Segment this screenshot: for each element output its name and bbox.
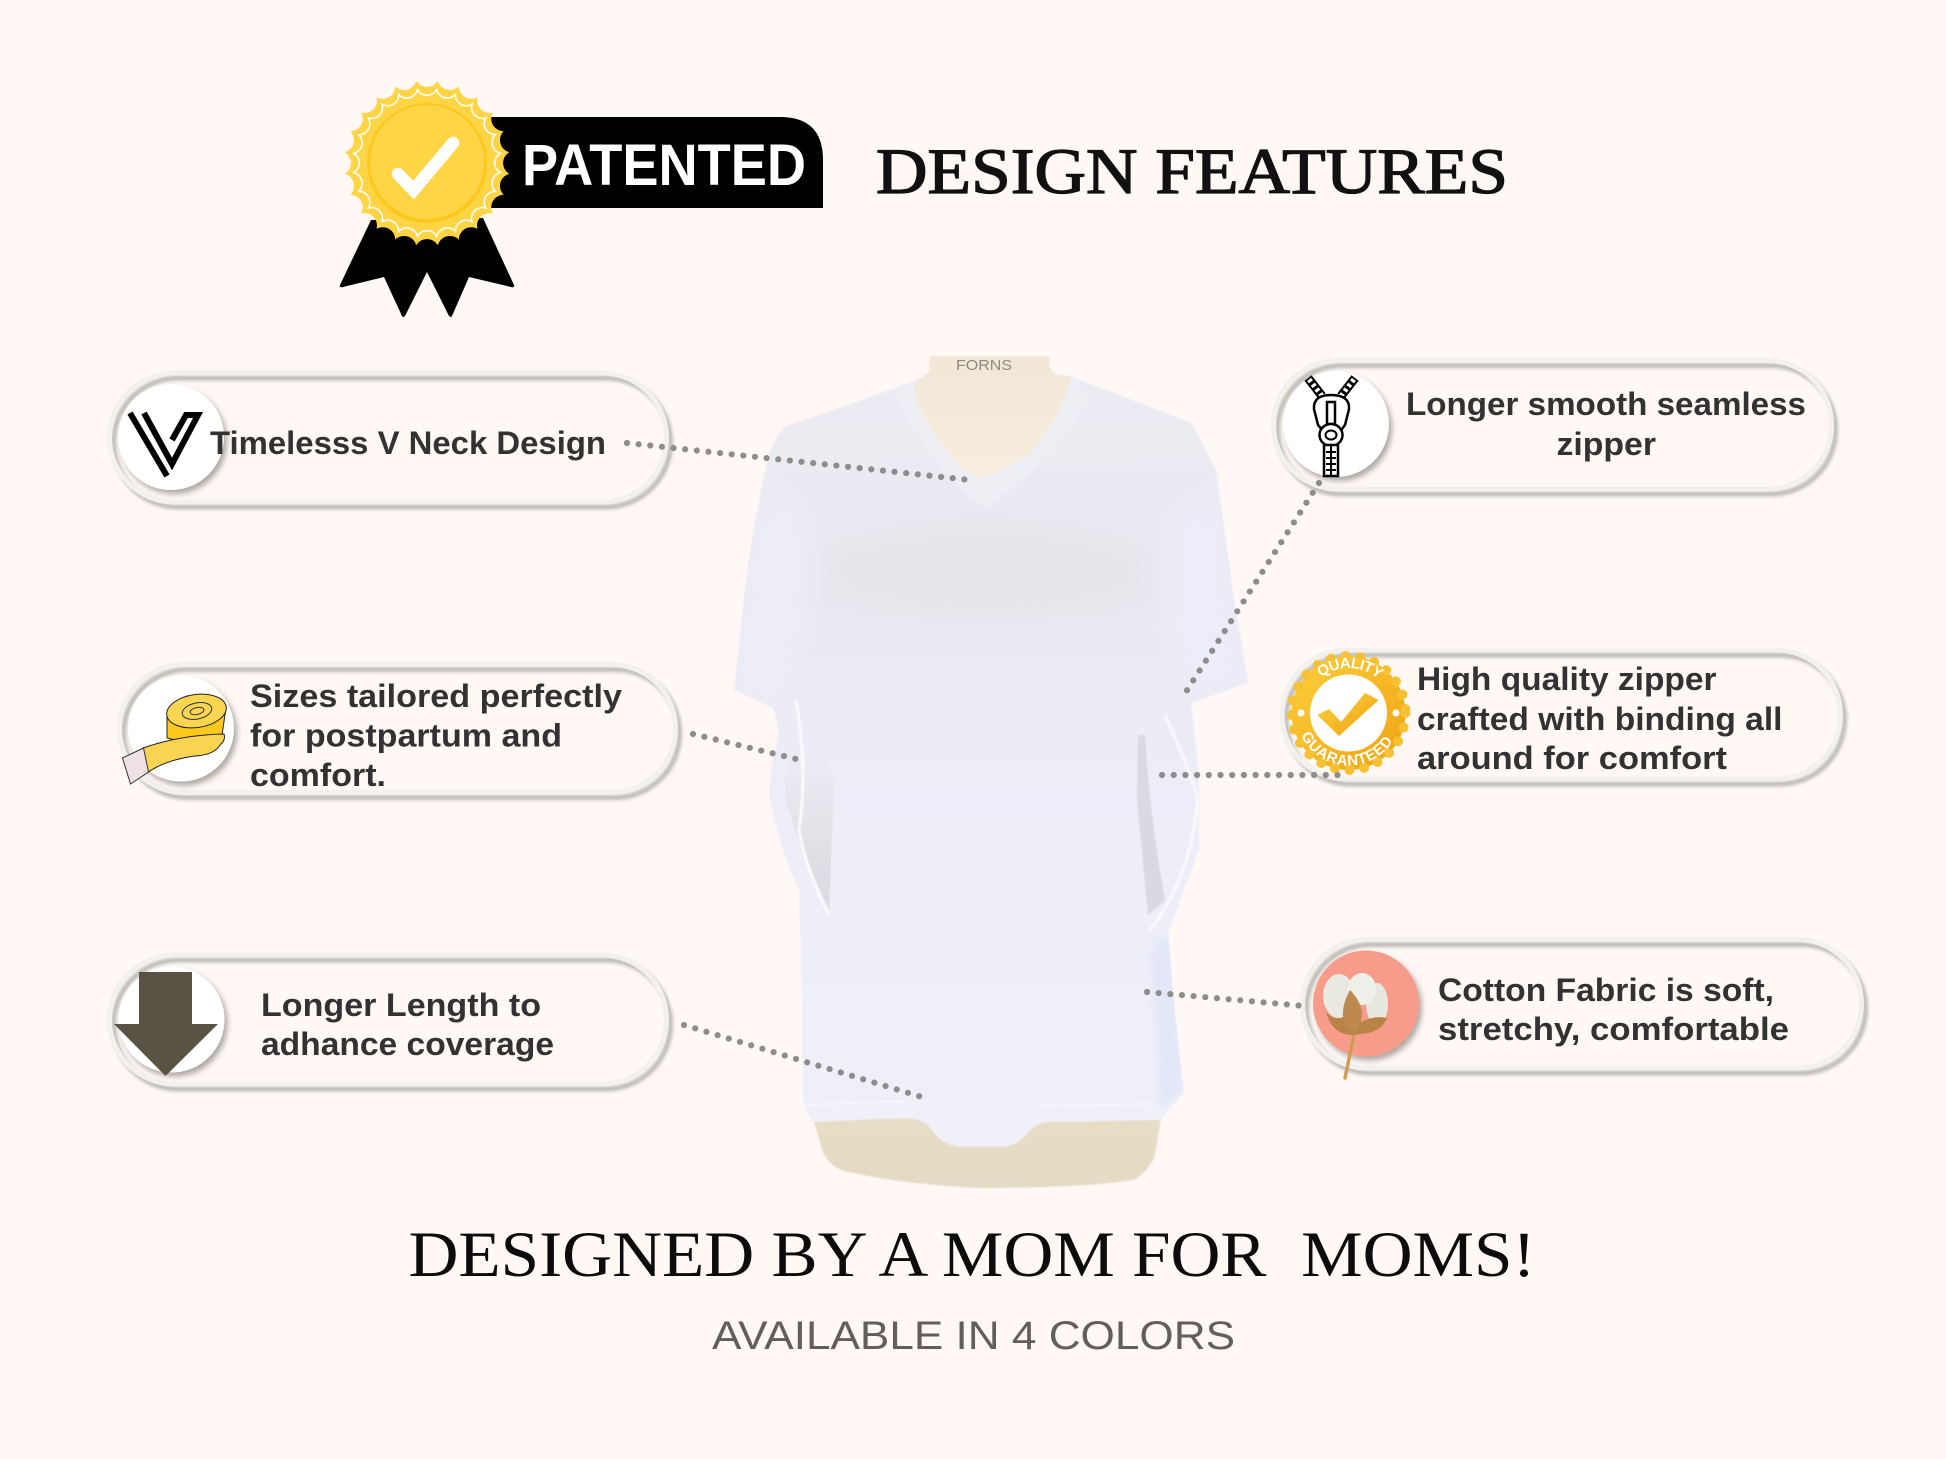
icon: measuring tape [122, 676, 234, 784]
panel: sizes [120, 664, 680, 798]
text: zipper: Longer smooth seamless [1406, 386, 1806, 422]
heading: design features: DESIGN FEATURES [876, 136, 1508, 208]
t-shirt on mannequin [734, 356, 1248, 1188]
icon: quality seal [1286, 651, 1410, 775]
text: cotton [1438, 972, 1789, 1047]
panel: cotton [1302, 940, 1866, 1078]
text: quality: around for comfort [1417, 740, 1727, 776]
heading: designed by a mom: DESIGNED BY A MOM FOR MOMS! [408, 1219, 1536, 1291]
neck and chest of mannequin [915, 356, 1071, 478]
text: longer length [261, 987, 554, 1062]
rosette medal [345, 81, 509, 245]
text: zipper [1406, 386, 1806, 462]
shirt body [734, 373, 1248, 1147]
text: cotton: stretchy, comfortable [1438, 1011, 1789, 1047]
icon: zipper [1283, 371, 1389, 477]
icon: quality seal: QUALITY [1318, 658, 1384, 677]
subheading: colors: AVAILABLE IN 4 COLORS [712, 1314, 1235, 1358]
dotted connectors [627, 443, 1340, 1098]
panel: quality [1280, 648, 1848, 788]
ribbon [340, 218, 514, 317]
shirt shading [735, 480, 1248, 1110]
panel: zipper [1274, 360, 1836, 494]
text: sizes: for postpartum and [250, 718, 562, 754]
text: quality: High quality zipper [1417, 661, 1716, 697]
text: longer length: Longer Length to [261, 987, 541, 1023]
text: quality: crafted with binding all [1417, 701, 1782, 737]
text: sizes: Sizes tailored perfectly [250, 678, 622, 714]
icon: v neck [118, 384, 224, 490]
patented badge [340, 81, 823, 317]
text: zipper: zipper [1556, 426, 1656, 462]
text: v neck: Timelesss V Neck Design [210, 425, 606, 461]
text: sizes [250, 678, 622, 793]
text: longer length: adhance coverage [261, 1026, 554, 1062]
text: cotton: Cotton Fabric is soft, [1438, 972, 1774, 1008]
mannequin base [813, 1118, 1161, 1188]
text: quality [1417, 661, 1782, 776]
icon: cotton [1313, 950, 1419, 1078]
banner [480, 117, 823, 208]
icon: quality seal: GUARANTEED [1302, 732, 1391, 766]
icon: down arrow [114, 966, 224, 1076]
mannequin brand text: FORNS [956, 357, 1012, 374]
collar [894, 373, 1092, 508]
panel: longer length [110, 955, 670, 1089]
patented label: PATENTED [522, 133, 806, 198]
panel: v neck [110, 373, 670, 507]
text: sizes: comfort. [250, 757, 386, 793]
